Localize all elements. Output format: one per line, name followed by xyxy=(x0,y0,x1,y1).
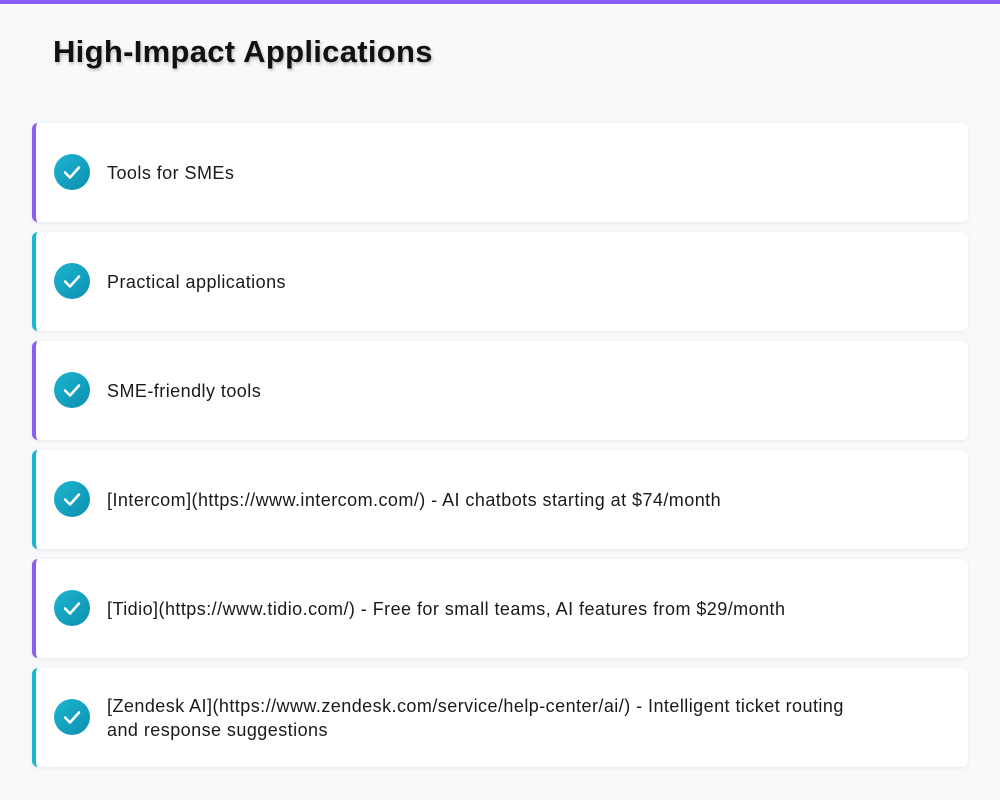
card: SME-friendly tools xyxy=(32,341,968,440)
title: High-Impact Applications xyxy=(53,34,433,69)
icon: check xyxy=(54,372,90,408)
text: [Zendesk AI](https://www.zendesk.com/service/help-center/ai/) - Intelligent ticket routing xyxy=(107,696,844,716)
card: tools for SMEs xyxy=(32,123,968,222)
icon: check xyxy=(54,263,90,299)
icon: check xyxy=(54,590,90,626)
card: Intercom xyxy=(32,450,968,549)
text: Tools for SMEs xyxy=(107,162,234,182)
card: Zendesk AI xyxy=(32,668,968,767)
text: and response suggestions xyxy=(107,720,328,740)
icon: check xyxy=(54,481,90,517)
icon: check xyxy=(54,154,90,190)
icon: check xyxy=(54,699,90,735)
text xyxy=(107,696,844,740)
text: Practical applications xyxy=(107,272,286,292)
text: [Tidio](https://www.tidio.com/) - Free for small teams, AI features from $29/month xyxy=(107,598,785,618)
card: practical applications xyxy=(32,232,968,331)
text: [Intercom](https://www.intercom.com/) - AI chatbots starting at $74/month xyxy=(107,490,721,510)
text: SME-friendly tools xyxy=(107,380,261,400)
card: Tidio xyxy=(32,559,968,658)
